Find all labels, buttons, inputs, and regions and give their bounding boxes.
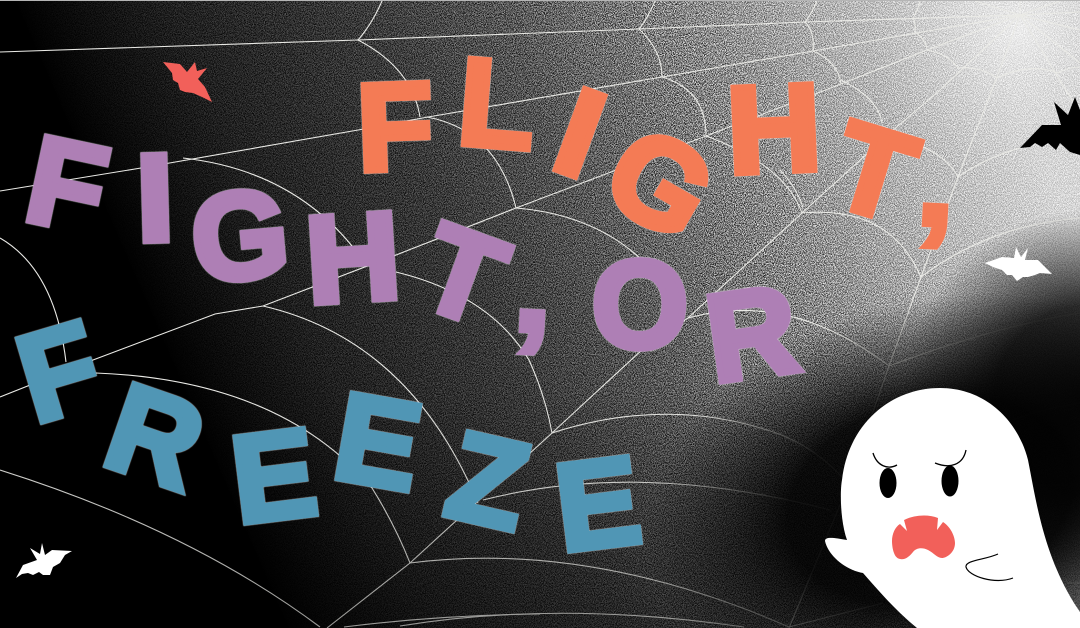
icon: black bat bbox=[1020, 97, 1080, 155]
ghost eyes bbox=[880, 466, 958, 498]
icon: white bat left bbox=[16, 543, 72, 578]
letters: OR bbox=[592, 236, 806, 409]
title line: FIGHT, OR: G bbox=[186, 164, 294, 309]
title line: FREEZE: Z bbox=[435, 406, 540, 557]
title line: FLIGHT,: T bbox=[817, 95, 930, 250]
title line: FLIGHT,: G bbox=[583, 100, 736, 267]
top edge line bbox=[0, 0, 1080, 1]
title line: FREEZE: F bbox=[3, 296, 115, 449]
title line: FLIGHT,: I bbox=[539, 61, 622, 204]
ghost illustration bbox=[825, 388, 1080, 628]
letters: OR: R bbox=[698, 260, 806, 409]
title line: FIGHT, OR: F bbox=[16, 110, 118, 261]
title line: FREEZE: E bbox=[549, 431, 648, 578]
title line: FLIGHT,: L bbox=[454, 33, 540, 176]
icon: white bat right bbox=[985, 247, 1052, 281]
title line: FLIGHT,: H bbox=[724, 57, 824, 200]
title line: FREEZE bbox=[3, 296, 648, 578]
letters: OR: O bbox=[592, 236, 688, 374]
ghost brows bbox=[873, 450, 966, 467]
title: Flight, Fight, or Freeze bbox=[3, 33, 963, 578]
title line: FIGHT, OR: T bbox=[404, 198, 522, 353]
title line: FLIGHT, bbox=[355, 33, 930, 267]
title line: FIGHT, OR bbox=[16, 110, 522, 353]
title line: FIGHT, OR: H bbox=[302, 186, 404, 330]
comma after FIGHT: , bbox=[508, 202, 560, 364]
ghost body bbox=[825, 388, 1080, 628]
title line: FLIGHT,: F bbox=[355, 57, 435, 198]
title line: FIGHT, OR: I bbox=[134, 128, 176, 268]
icon: red bat bbox=[163, 62, 212, 102]
ghost arm line bbox=[966, 554, 1013, 580]
comma after FLIGHT: , bbox=[911, 96, 963, 258]
ghost mouth bbox=[892, 516, 955, 559]
title line: FREEZE: R bbox=[90, 358, 220, 517]
title line: FREEZE: E bbox=[325, 367, 431, 518]
title line: FREEZE: E bbox=[225, 403, 324, 550]
